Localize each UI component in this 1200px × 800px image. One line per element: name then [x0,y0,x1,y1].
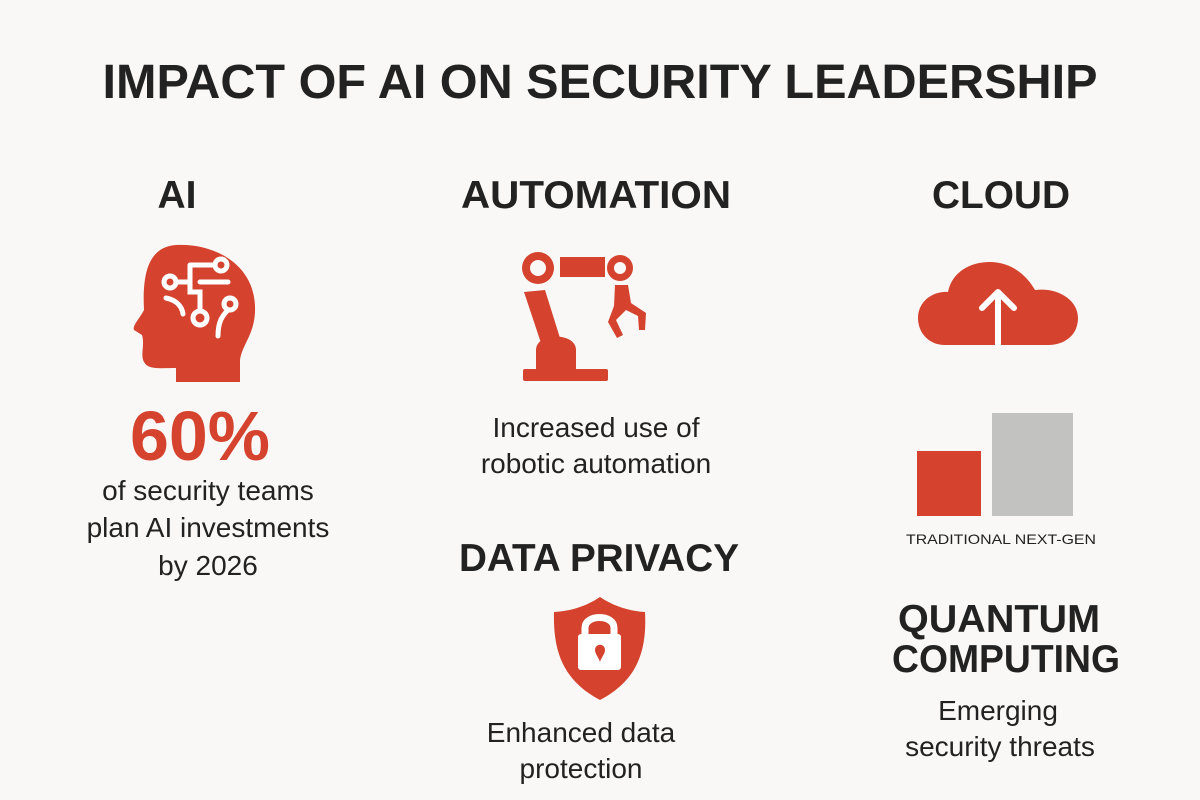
heading: data privacy: DATA PRIVACY [459,537,739,580]
panel: AI [87,174,329,581]
icon: robotic arm [522,252,646,381]
text: privacy description [487,717,676,784]
panel: automation [461,174,731,479]
heading: automation: AUTOMATION [461,174,731,217]
text: AI description: by 2026 [158,550,258,581]
icon: shield lock [554,597,645,700]
heading: cloud: CLOUD [932,174,1070,217]
text: automation description [481,412,711,479]
title: IMPACT OF AI ON SECURITY LEADERSHIP [102,56,1098,109]
heading: quantum computing: COMPUTING [892,638,1120,681]
bar chart [906,413,1096,547]
text: privacy description: protection [520,753,642,784]
heading: quantum computing [892,598,1120,681]
panel: quantum computing [892,598,1120,762]
text: automation description: Increased use of [492,412,700,443]
text: AI description: plan AI investments [87,512,329,543]
bar chart: TRADITIONAL NEXT-GEN [906,531,1096,547]
heading: AI: AI [158,174,196,217]
panel: data privacy [459,537,739,784]
panel: cloud [906,174,1096,547]
text: AI description [87,475,329,581]
icon: cloud upload [918,262,1078,345]
stat: 60%: 60% [130,397,270,475]
text: quantum description: Emerging [938,695,1058,726]
icon: head with circuit [134,245,255,382]
text: quantum description: security threats [905,731,1095,762]
text: quantum description [905,695,1095,762]
text: privacy description: Enhanced data [487,717,676,748]
text: AI description: of security teams [102,475,314,506]
heading: quantum computing: QUANTUM [898,598,1100,641]
text: automation description: robotic automation [481,448,711,479]
